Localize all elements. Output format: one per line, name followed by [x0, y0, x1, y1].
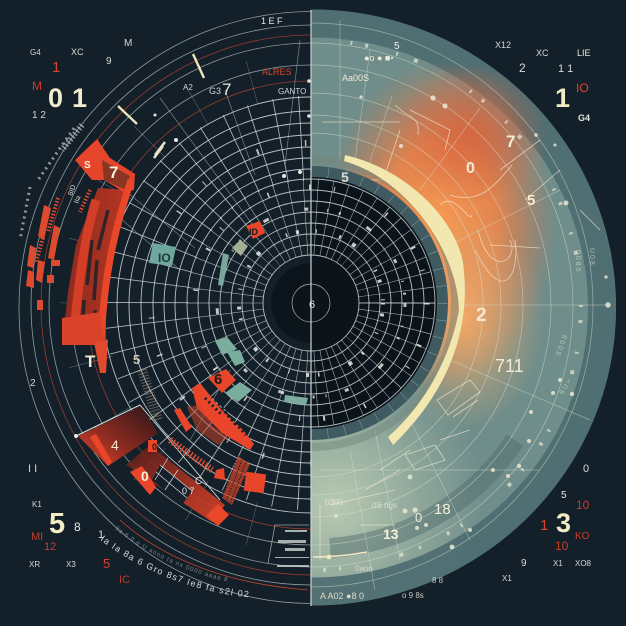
red small marker — [214, 468, 225, 480]
red top block — [75, 139, 135, 192]
numbers on chart: 0 — [141, 468, 149, 484]
corner labels bottom right: X1 — [553, 559, 563, 568]
red left arc — [74, 200, 96, 330]
red bar — [174, 408, 192, 432]
white small dots — [74, 79, 311, 438]
corner labels top left: 1 — [72, 83, 87, 113]
red tag — [246, 221, 265, 239]
scattered dots — [334, 57, 611, 549]
inner rings — [187, 179, 435, 427]
red bottom block — [62, 312, 105, 345]
corner labels bottom left: 5 — [103, 556, 110, 571]
corner labels top left: M — [32, 79, 42, 93]
corner labels top left: G4 — [30, 48, 41, 57]
red square right — [244, 472, 266, 493]
lower left red panel — [76, 383, 266, 526]
corner labels bottom left: 5 — [49, 508, 65, 540]
corner labels top right: 1 — [555, 83, 570, 113]
numbers on chart: 4 — [111, 437, 119, 453]
cream ticks — [154, 142, 165, 158]
corner labels bottom right: X1 — [502, 574, 512, 583]
teal lower blocks — [215, 337, 237, 355]
pale column tick labels — [20, 125, 82, 240]
small right side labels: ●o ● ■ — [364, 53, 390, 63]
corner labels top right — [495, 40, 591, 123]
red bright arc — [101, 180, 131, 345]
corner labels bottom right: KO — [575, 531, 590, 542]
numbers on chart — [84, 16, 535, 542]
red drop bar — [94, 340, 108, 373]
corner labels bottom left: MI — [31, 531, 43, 543]
center fade — [271, 263, 351, 343]
curved bottom labels: Ia Ia 8a 6 Gro 8s7 Ie8 fa s2l 02 — [100, 536, 248, 598]
corner labels bottom left: XR — [29, 560, 40, 569]
left chart numbers: 7 — [222, 80, 231, 99]
numbers on chart: 7 — [109, 163, 118, 182]
ring labels vertical — [555, 248, 595, 396]
teal block — [149, 243, 176, 266]
corner labels top left: 1 — [52, 59, 60, 76]
numbers on chart: C — [195, 476, 202, 487]
corner labels top left: M — [124, 38, 132, 49]
panel: left half outer grid — [18, 11, 310, 604]
middle rings — [106, 96, 310, 514]
red number tag — [208, 369, 236, 393]
corner labels top right: IO — [576, 81, 589, 95]
numbers on chart: A2 — [183, 83, 193, 92]
numbers on chart: 13 — [383, 526, 399, 542]
numbers on chart: 18 — [434, 501, 451, 518]
center number: 6 — [309, 299, 315, 311]
pale block — [232, 240, 248, 256]
numbers on chart: 0 — [152, 442, 157, 452]
small right side labels: o 9 8s — [402, 591, 424, 600]
cream arc — [344, 155, 465, 445]
bottom right table block — [275, 530, 309, 567]
teal disc base — [311, 10, 616, 606]
cream dot — [327, 555, 331, 559]
red gradient trapezoid — [78, 406, 158, 466]
small right side labels: 0aoo — [355, 564, 373, 573]
cream tail line — [313, 552, 367, 557]
inner radial spokes — [225, 217, 397, 389]
black dark disc — [312, 177, 437, 429]
numbers on chart: 5 — [133, 352, 140, 367]
corner labels bottom right: XO8 — [575, 559, 592, 568]
panel: left red elements: 9a 6 0 e U anno ta nx 0000 aaaa 8 — [116, 526, 228, 582]
right side radial lines — [320, 20, 608, 590]
corner labels bottom left: 8 — [74, 520, 81, 534]
ring labels vertical: U 0 8 — [588, 248, 595, 265]
corner labels bottom left: 1 — [98, 529, 104, 541]
corner labels bottom left: X3 — [66, 560, 76, 569]
small right side labels — [320, 53, 444, 601]
red tick stripes — [36, 190, 90, 262]
numbers on chart: GANTO — [278, 87, 306, 96]
numbers on chart: 0 — [415, 510, 422, 525]
ring labels vertical: 0 0 8 0 — [574, 250, 581, 272]
grid cutout in band — [152, 465, 192, 505]
numbers on chart: 711 — [495, 356, 524, 376]
corner labels bottom right: 5 — [561, 490, 567, 501]
small right side labels: 8 8 — [432, 576, 444, 585]
teal bar — [218, 253, 229, 286]
red striped column — [222, 456, 250, 505]
red tick columns — [26, 205, 60, 310]
corner labels top right: G4 — [578, 113, 590, 123]
corner labels bottom right: 10 — [576, 498, 590, 512]
corner labels top left: XC — [71, 47, 84, 57]
box outline — [76, 405, 140, 436]
red top block shading — [102, 160, 130, 190]
corner labels bottom right: 3 — [556, 508, 571, 538]
corner labels bottom right — [502, 463, 592, 583]
numbers on chart: 5 — [341, 169, 349, 185]
red jagged arc — [192, 383, 254, 450]
red oval — [148, 440, 157, 452]
small right side labels: Aa00S — [342, 73, 369, 83]
red block under zero — [130, 466, 156, 495]
corner labels bottom left: K1 — [32, 500, 42, 509]
numbers on chart: G3 — [209, 86, 221, 96]
light glow lower left — [312, 396, 468, 605]
small right side labels: A A02 ●8 0 — [320, 591, 364, 601]
corner labels bottom right: 1 — [540, 517, 548, 534]
corner labels bottom right: 0 — [583, 463, 589, 475]
corner labels top right: X12 — [495, 40, 511, 50]
numbers on chart: 1 E F — [261, 16, 283, 26]
numbers on chart: 0 — [466, 160, 475, 177]
ring labels vertical: 8 0 0 8 — [555, 334, 569, 357]
panel: right half teal disc — [311, 10, 616, 606]
corner labels bottom right: 9 — [521, 558, 527, 569]
corner labels top right: 2 — [519, 61, 526, 75]
corner labels bottom left: 12 — [44, 541, 56, 553]
orange heat glow — [337, 65, 550, 422]
red arc lower — [120, 520, 308, 590]
pale text column: 8ID — [67, 184, 78, 197]
numbers on chart: 6 — [214, 371, 222, 388]
outer rings — [18, 11, 310, 604]
small right side labels: 0S ngs — [372, 501, 397, 510]
corner labels top left: 9 — [106, 56, 112, 67]
teal ring around dark disc — [312, 166, 448, 440]
corner labels bottom left: I I — [28, 463, 37, 475]
corner labels top left: 1 2 — [32, 110, 46, 121]
corner labels top right: LIE — [577, 48, 591, 58]
panel: left red elements — [19, 54, 310, 598]
corner labels bottom right: 10 — [555, 539, 569, 553]
numbers on chart: IO — [158, 251, 171, 265]
right chart numbers: 5 — [394, 41, 400, 52]
ring labels vertical: 8 U ⌐ — [559, 378, 573, 396]
numbers on chart: 0 7 — [182, 486, 195, 496]
dash ring: right pale ticks — [323, 40, 583, 572]
outer darker ring — [311, 10, 616, 606]
pale text column: IIa — [73, 195, 83, 205]
pale text column — [67, 184, 83, 205]
red box edge — [90, 434, 112, 466]
dark red wedge band — [126, 445, 225, 522]
scatter ticks outer — [148, 140, 310, 466]
red band shade — [65, 188, 124, 340]
bottom right frame — [268, 525, 309, 563]
radial spokes outer — [60, 61, 258, 545]
numbers on chart: 2 — [476, 305, 487, 326]
corner labels bottom left: IC — [119, 574, 130, 586]
lower mid ring band — [330, 440, 515, 548]
center circle — [292, 284, 330, 322]
panel: inner grid across both halves — [187, 179, 435, 427]
numbers on chart: T — [85, 352, 96, 371]
numbers on chart: 7 — [506, 132, 515, 151]
corner labels bottom left — [28, 378, 130, 586]
corner labels top left — [30, 38, 132, 121]
numbers on chart: 5 — [527, 192, 535, 209]
long spokes — [122, 40, 300, 440]
red stem slots — [82, 210, 108, 340]
scatter ticks — [239, 231, 383, 375]
right side concentric lines — [312, 22, 594, 588]
cream needles — [118, 54, 204, 124]
radial spokes mid — [106, 96, 304, 510]
right side detail marks — [320, 105, 600, 560]
pale text stripes — [142, 370, 158, 420]
numbers on chart: S — [84, 160, 91, 171]
numbers on chart: ALRES — [262, 67, 292, 77]
corner labels bottom left: 2 — [30, 378, 36, 389]
small right side labels: 0300 — [325, 498, 343, 507]
red striped wedge — [187, 405, 228, 445]
teal ring grid — [326, 168, 448, 438]
corner labels top left: 0 — [48, 83, 63, 113]
red square bottom — [206, 504, 229, 526]
numbers on chart: ID — [249, 227, 259, 237]
center divider line — [310, 10, 312, 606]
corner labels top right: 1 1 — [558, 63, 573, 75]
red thin rings — [40, 34, 310, 576]
corner labels top right: XC — [536, 48, 549, 58]
